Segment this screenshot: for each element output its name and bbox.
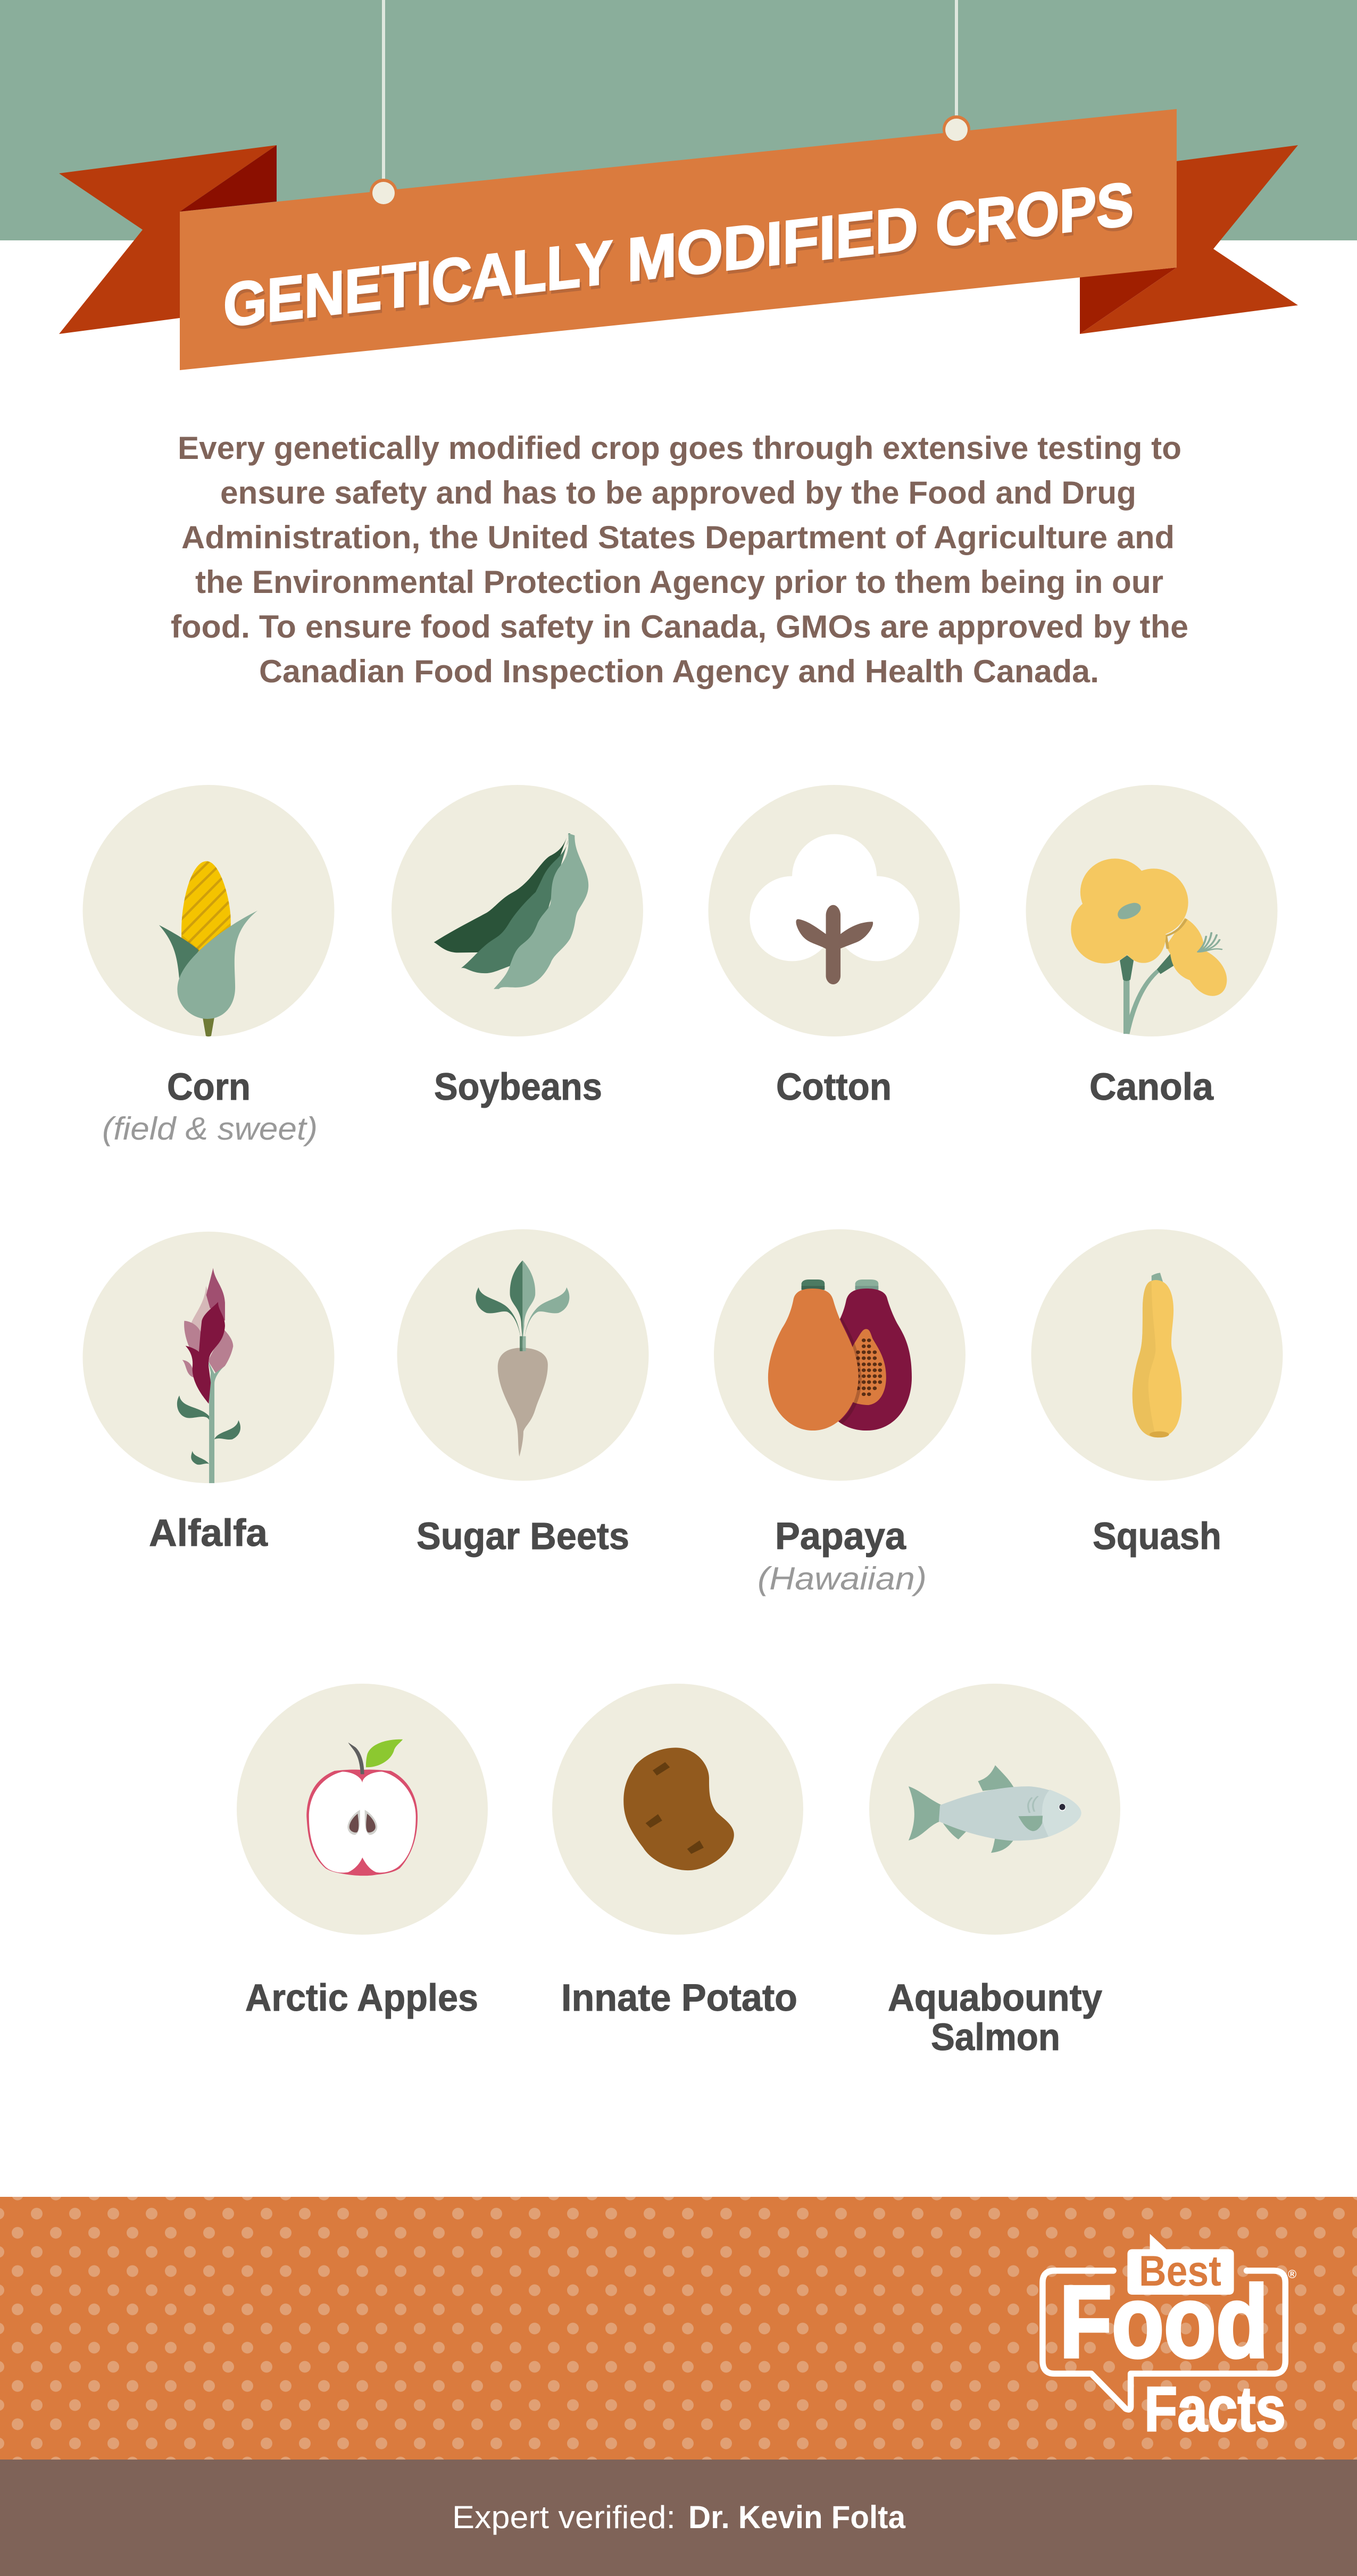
footer: dotted orange band	[0, 2197, 1357, 2460]
papaya seeds	[856, 1339, 882, 1396]
sublabel: field and sweet: (field & sweet)	[102, 1111, 318, 1147]
icon: soybeans	[434, 833, 588, 989]
label: arctic apples: Arctic Apples	[245, 1977, 478, 2019]
hanging strings	[384, 0, 956, 181]
logo word: Facts: Facts	[1144, 2374, 1286, 2445]
label: papaya: Papaya	[775, 1516, 906, 1558]
credit text	[452, 2499, 906, 2535]
credit text: Dr. Kevin Folta	[688, 2499, 906, 2535]
title shadow: MODIFIED	[629, 197, 920, 298]
icon: cotton	[750, 834, 919, 984]
intro paragraph: Administration, the United States Department of Agriculture and	[181, 520, 1175, 555]
left ribbon tail	[59, 145, 277, 334]
panel: soybeans	[392, 785, 643, 1108]
panel: squash	[1031, 1230, 1283, 1558]
label: corn: Corn	[167, 1066, 251, 1108]
footer: brown credit bar	[0, 2460, 1357, 2576]
icon: canola	[1071, 858, 1227, 1034]
panel: cotton	[709, 785, 960, 1108]
right ribbon tail	[1080, 145, 1298, 334]
panel: sugar beets	[397, 1230, 649, 1558]
icon: squash	[1133, 1273, 1181, 1437]
logo: Best Food Facts	[1043, 2234, 1296, 2445]
intro paragraph: Every genetically modified crop goes through extensive testing to	[178, 430, 1181, 466]
label: innate potato: Innate Potato	[561, 1977, 797, 2019]
intro paragraph: the Environmental Protection Agency prior to them being in our	[195, 564, 1163, 600]
icon: salmon	[909, 1765, 1081, 1853]
panel: aquabounty salmon	[869, 1684, 1120, 2059]
label: aquabounty salmon	[888, 1977, 1102, 2059]
label: soybeans: Soybeans	[434, 1066, 602, 1108]
icon: papaya	[768, 1279, 912, 1431]
panel: corn	[83, 785, 334, 1147]
label: aquabounty salmon: Aquabounty	[888, 1977, 1102, 2019]
label: cotton: Cotton	[776, 1066, 892, 1108]
icon: corn	[159, 861, 257, 1036]
header background	[0, 0, 1357, 240]
title	[223, 170, 1134, 340]
icon: potato	[623, 1747, 734, 1870]
logo word: Best: Best	[1139, 2247, 1221, 2295]
panel: papaya	[714, 1230, 965, 1596]
title shadow	[225, 173, 1135, 343]
intro paragraph	[171, 430, 1188, 689]
icon: apple	[306, 1739, 418, 1876]
panel: innate potato	[552, 1684, 803, 2019]
sublabel: hawaiian: (Hawaiian)	[757, 1561, 927, 1596]
intro paragraph: food. To ensure food safety in Canada, GMOs are approved by the	[171, 609, 1188, 645]
credit text: Expert verified:	[452, 2499, 676, 2535]
panel: canola	[1026, 785, 1278, 1108]
icon: sugar beet	[476, 1260, 569, 1457]
panel: arctic apples	[237, 1684, 488, 2019]
label: canola: Canola	[1089, 1066, 1213, 1108]
title banner	[59, 0, 1298, 370]
label: squash: Squash	[1093, 1516, 1221, 1558]
banner eyelets	[370, 115, 970, 206]
title shadow: GENETICALLY	[225, 231, 614, 343]
orange banner	[180, 109, 1177, 370]
intro paragraph: ensure safety and has to be approved by the Food and Drug	[220, 475, 1136, 511]
icon: alfalfa	[177, 1268, 240, 1483]
logo speech bubble	[1043, 2234, 1285, 2410]
title: GENETICALLY	[223, 228, 613, 340]
label: aquabounty salmon: Salmon	[931, 2017, 1060, 2059]
label: alfalfa: Alfalfa	[149, 1512, 268, 1554]
panel: alfalfa	[83, 1232, 334, 1554]
intro paragraph: Canadian Food Inspection Agency and Health Canada.	[259, 654, 1099, 689]
logo word: Food: Food	[1060, 2264, 1268, 2379]
title shadow: CROPS	[937, 173, 1135, 263]
label: sugar beets: Sugar Beets	[417, 1516, 629, 1558]
registered mark: ®	[1288, 2268, 1296, 2281]
title: MODIFIED	[627, 194, 918, 295]
title: CROPS	[936, 170, 1134, 260]
